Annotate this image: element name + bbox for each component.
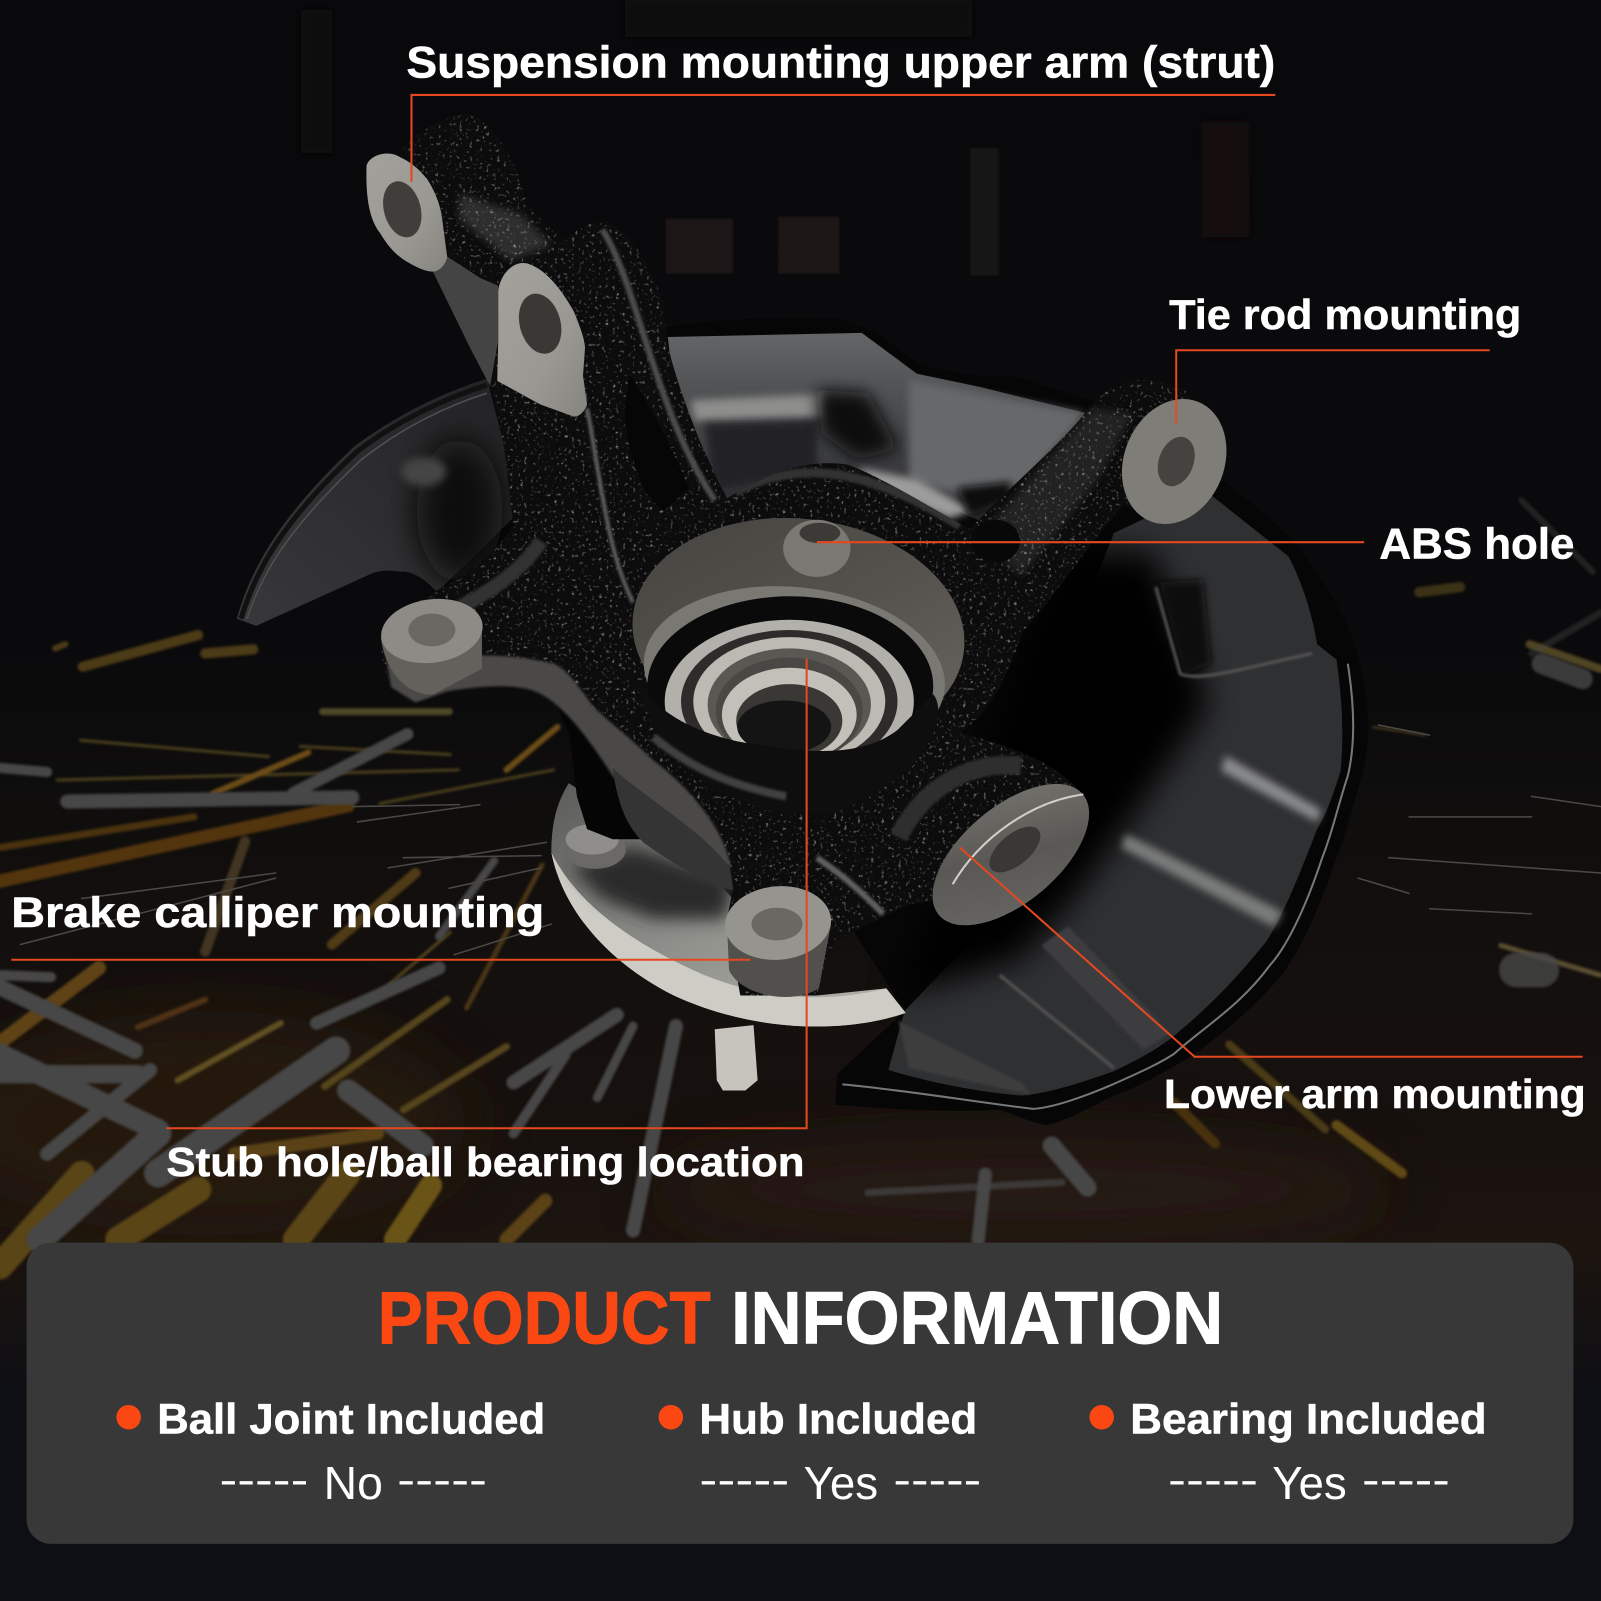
item: hub: ----- <box>699 1456 789 1504</box>
upper shield highlights <box>691 380 1082 519</box>
caliper boss lower <box>722 882 834 997</box>
wing rim and shading <box>241 385 502 619</box>
callout: stub hole <box>166 659 807 1185</box>
left arm grey flank <box>433 255 498 386</box>
pocket on face <box>1159 580 1211 676</box>
item: ball joint: No <box>324 1457 383 1509</box>
bearing assembly <box>647 596 933 783</box>
flange dark shading <box>572 847 735 919</box>
grey streak sparks <box>0 500 1601 1241</box>
callout: tie rod <box>1169 291 1521 424</box>
callout: suspension mounting: Suspension mounting upper arm (strut) <box>406 37 1275 88</box>
lower arm boss face <box>908 757 1114 952</box>
upper arm rear hole <box>377 177 427 242</box>
flange disc <box>551 783 906 1027</box>
callout: ABS hole: ABS hole <box>1379 520 1574 569</box>
faint workshop machinery <box>301 0 1249 276</box>
lower face shading <box>613 768 733 890</box>
floor glow <box>653 1138 1389 1241</box>
brake dust shield <box>237 318 1368 1125</box>
item: ball joint: Ball Joint Included <box>157 1396 545 1444</box>
lit stripes <box>1221 756 1321 822</box>
thin spark lines <box>20 725 1601 955</box>
wheel stud <box>715 1025 758 1090</box>
hub housing ring <box>621 502 976 764</box>
shield base and rim <box>633 318 1368 1125</box>
cast body <box>381 114 1205 996</box>
item: bearing: ----- <box>1362 1456 1450 1504</box>
callout: lower arm: Lower arm mounting <box>1164 1071 1586 1117</box>
panel heading: PRODUCT <box>378 1277 711 1360</box>
item: bearing <box>1089 1396 1487 1509</box>
item: bearing: ----- <box>1168 1456 1258 1504</box>
black neck <box>556 705 643 839</box>
item: ball joint <box>116 1396 545 1509</box>
item: bearing: Bearing Included <box>1130 1396 1487 1444</box>
lip highlight <box>653 737 786 796</box>
item: ball joint: ----- <box>397 1456 487 1504</box>
callout: lower arm <box>960 847 1586 1117</box>
shield rolled rim <box>842 664 1353 1109</box>
lower flank grey band <box>384 643 731 868</box>
ABS boss <box>971 520 1020 563</box>
panel: product information <box>27 1243 1573 1544</box>
upper shield face <box>668 333 1087 521</box>
lower hub flange and stud <box>551 705 906 1090</box>
tie arm sheen <box>980 408 1133 577</box>
panel heading <box>378 1277 1223 1360</box>
panel heading: INFORMATION <box>731 1277 1223 1360</box>
upper arm plate rear <box>366 153 447 272</box>
upper arm front hole <box>512 289 568 359</box>
orange and yellow sparks <box>0 587 1600 1266</box>
item: hub: ----- <box>893 1456 981 1504</box>
body highlights <box>449 230 1021 914</box>
flange bright edge <box>551 853 906 1027</box>
callout: suspension mounting <box>406 37 1275 182</box>
callout: stub hole: Stub hole/ball bearing location <box>166 1139 805 1185</box>
item: hub: Hub Included <box>699 1396 977 1444</box>
black shadow on face <box>899 551 1210 996</box>
item: bearing: Yes <box>1272 1457 1347 1509</box>
item: hub: Yes <box>804 1457 878 1509</box>
casting lip below bearing <box>636 676 938 814</box>
hub lighter lip <box>635 572 954 776</box>
flange bolt head <box>565 824 626 869</box>
caliper boss left <box>377 593 487 694</box>
arm bridge sheen <box>459 194 551 260</box>
item: hub <box>659 1396 981 1509</box>
window slot in arm <box>625 374 689 511</box>
right shield face <box>888 490 1342 1096</box>
tie rod plate <box>1104 383 1245 540</box>
left wing of shield <box>237 379 521 626</box>
item: ball joint: ----- <box>220 1456 308 1504</box>
steering knuckle <box>366 102 1245 1021</box>
upper arm plate front <box>497 263 587 417</box>
callout: brake calliper: Brake calliper mounting <box>11 889 544 937</box>
callout: tie rod: Tie rod mounting <box>1169 291 1521 338</box>
cast texture <box>368 102 1225 1021</box>
hub stud <box>783 520 851 577</box>
tie rod hole <box>1151 432 1201 491</box>
callouts <box>11 37 1586 1185</box>
